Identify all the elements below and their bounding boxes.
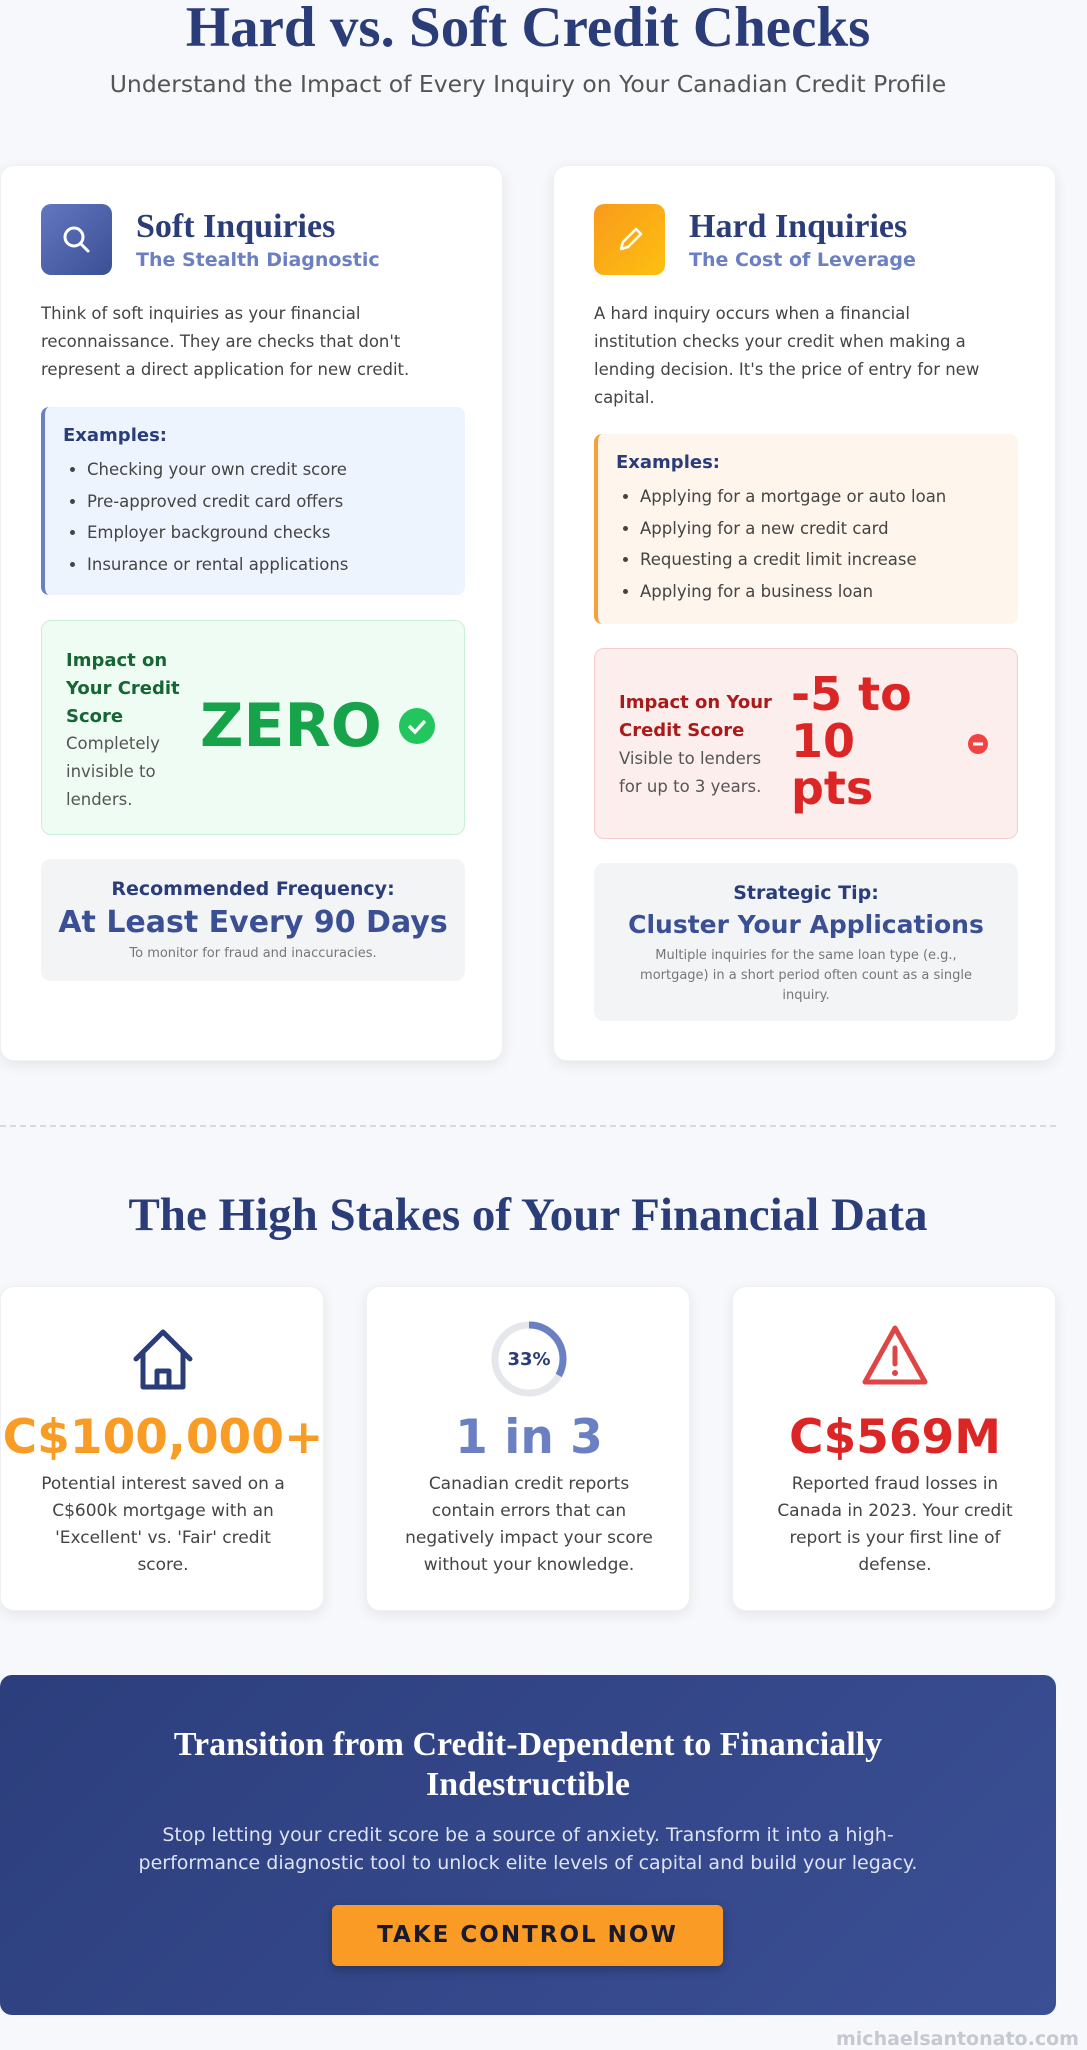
impact box: zero: ZERO [200,691,382,761]
stat: C$100,000+ [3,1410,323,1465]
examples list [41,407,465,595]
stat card: interest: Potential interest saved on a C$600k mortgage with an 'Excellent' vs. 'Fair' credit score. [41,1474,285,1575]
tip box [594,863,1018,1021]
CTA panel [0,1675,1056,2015]
tip box: Multiple inquiries for the same loan type (e.g., mortgage) in a short period often count as a single inquiry. [640,948,972,1003]
icon: house [134,1330,192,1390]
panel: soft inquiries [0,165,503,1061]
footer: michaelsantonato.com [836,2028,1079,2050]
stat card: errors [366,1286,690,1611]
CTA heading: Transition from Credit-Dependent to Financially Indestructible [174,1726,882,1803]
impact box: zero [41,620,465,835]
impact box: hard: Impact on Your Credit Score [619,692,772,741]
icon: 33% ring: 33% [507,1349,551,1370]
impact box: hard: -5 to 10 pts [791,667,912,815]
button [332,1905,723,1966]
section heading: The High Stakes of Your Financial Data [128,1189,928,1241]
examples list: Requesting a credit limit increase [640,550,917,569]
examples list: Checking your own credit score [87,460,347,479]
CTA text: Stop letting your credit score be a source of anxiety. Transform it into a high-performance diagnostic tool to unlock elite levels of capital and build your legacy. [139,1824,917,1874]
examples list: Applying for a business loan [640,582,873,600]
examples list: Pre-approved credit card offers [87,492,343,510]
examples list: Examples: [616,452,720,473]
panel: hard inquiries [553,165,1056,1061]
impact box: hard: Visible to lenders for up to 3 years. [619,749,761,796]
frequency box: Recommended Frequency: [111,878,395,900]
icon: magnifier [41,204,112,275]
text: description: A hard inquiry occurs when a financial institution checks your credit when making a lending decision. It's the price of entry for new capital. [594,304,979,407]
icon: minus [968,734,988,754]
impact box: zero: Completely invisible to lenders. [66,734,160,809]
stat: C$569M [789,1410,1001,1465]
icon: pencil [594,204,665,275]
examples list: Insurance or rental applications [87,554,348,574]
heading: Soft Inquiries [136,208,335,245]
text: description: Think of soft inquiries as your financial reconnaissance. They are checks that don't represent a direct application for new credit. [41,304,409,379]
examples list: Examples: [63,425,167,446]
impact box: zero: Impact on Your Credit Score [66,650,180,727]
frequency box: At Least Every 90 Days [58,905,448,940]
impact box: hard [594,648,1018,839]
tip box: Cluster Your Applications [628,910,984,939]
examples list: Applying for a new credit card [640,518,889,538]
stat card: fraud [732,1286,1056,1611]
subheading: The Stealth Diagnostic [136,249,380,271]
icon: 33% ring [492,1322,566,1396]
stat card: errors: Canadian credit reports contain errors that can negatively impact your score without your knowledge. [405,1474,653,1575]
stat card: interest [0,1286,324,1611]
subtitle: Understand the Impact of Every Inquiry on Your Canadian Credit Profile [110,70,946,98]
stat card: fraud: Reported fraud losses in Canada in 2023. Your credit report is your first line of defense. [777,1474,1013,1575]
examples list [594,434,1018,624]
heading: Hard Inquiries [689,208,907,245]
icon: warning [862,1326,928,1384]
button: TAKE CONTROL NOW [377,1922,678,1948]
frequency box: To monitor for fraud and inaccuracies. [129,946,377,961]
frequency box [41,859,465,981]
examples list: Employer background checks [87,523,330,542]
tip box: Strategic Tip: [733,882,879,904]
subheading: The Cost of Leverage [689,249,916,271]
icon: check [399,708,435,744]
examples list: Applying for a mortgage or auto loan [640,487,946,506]
stat: 1 in 3 [455,1410,603,1465]
